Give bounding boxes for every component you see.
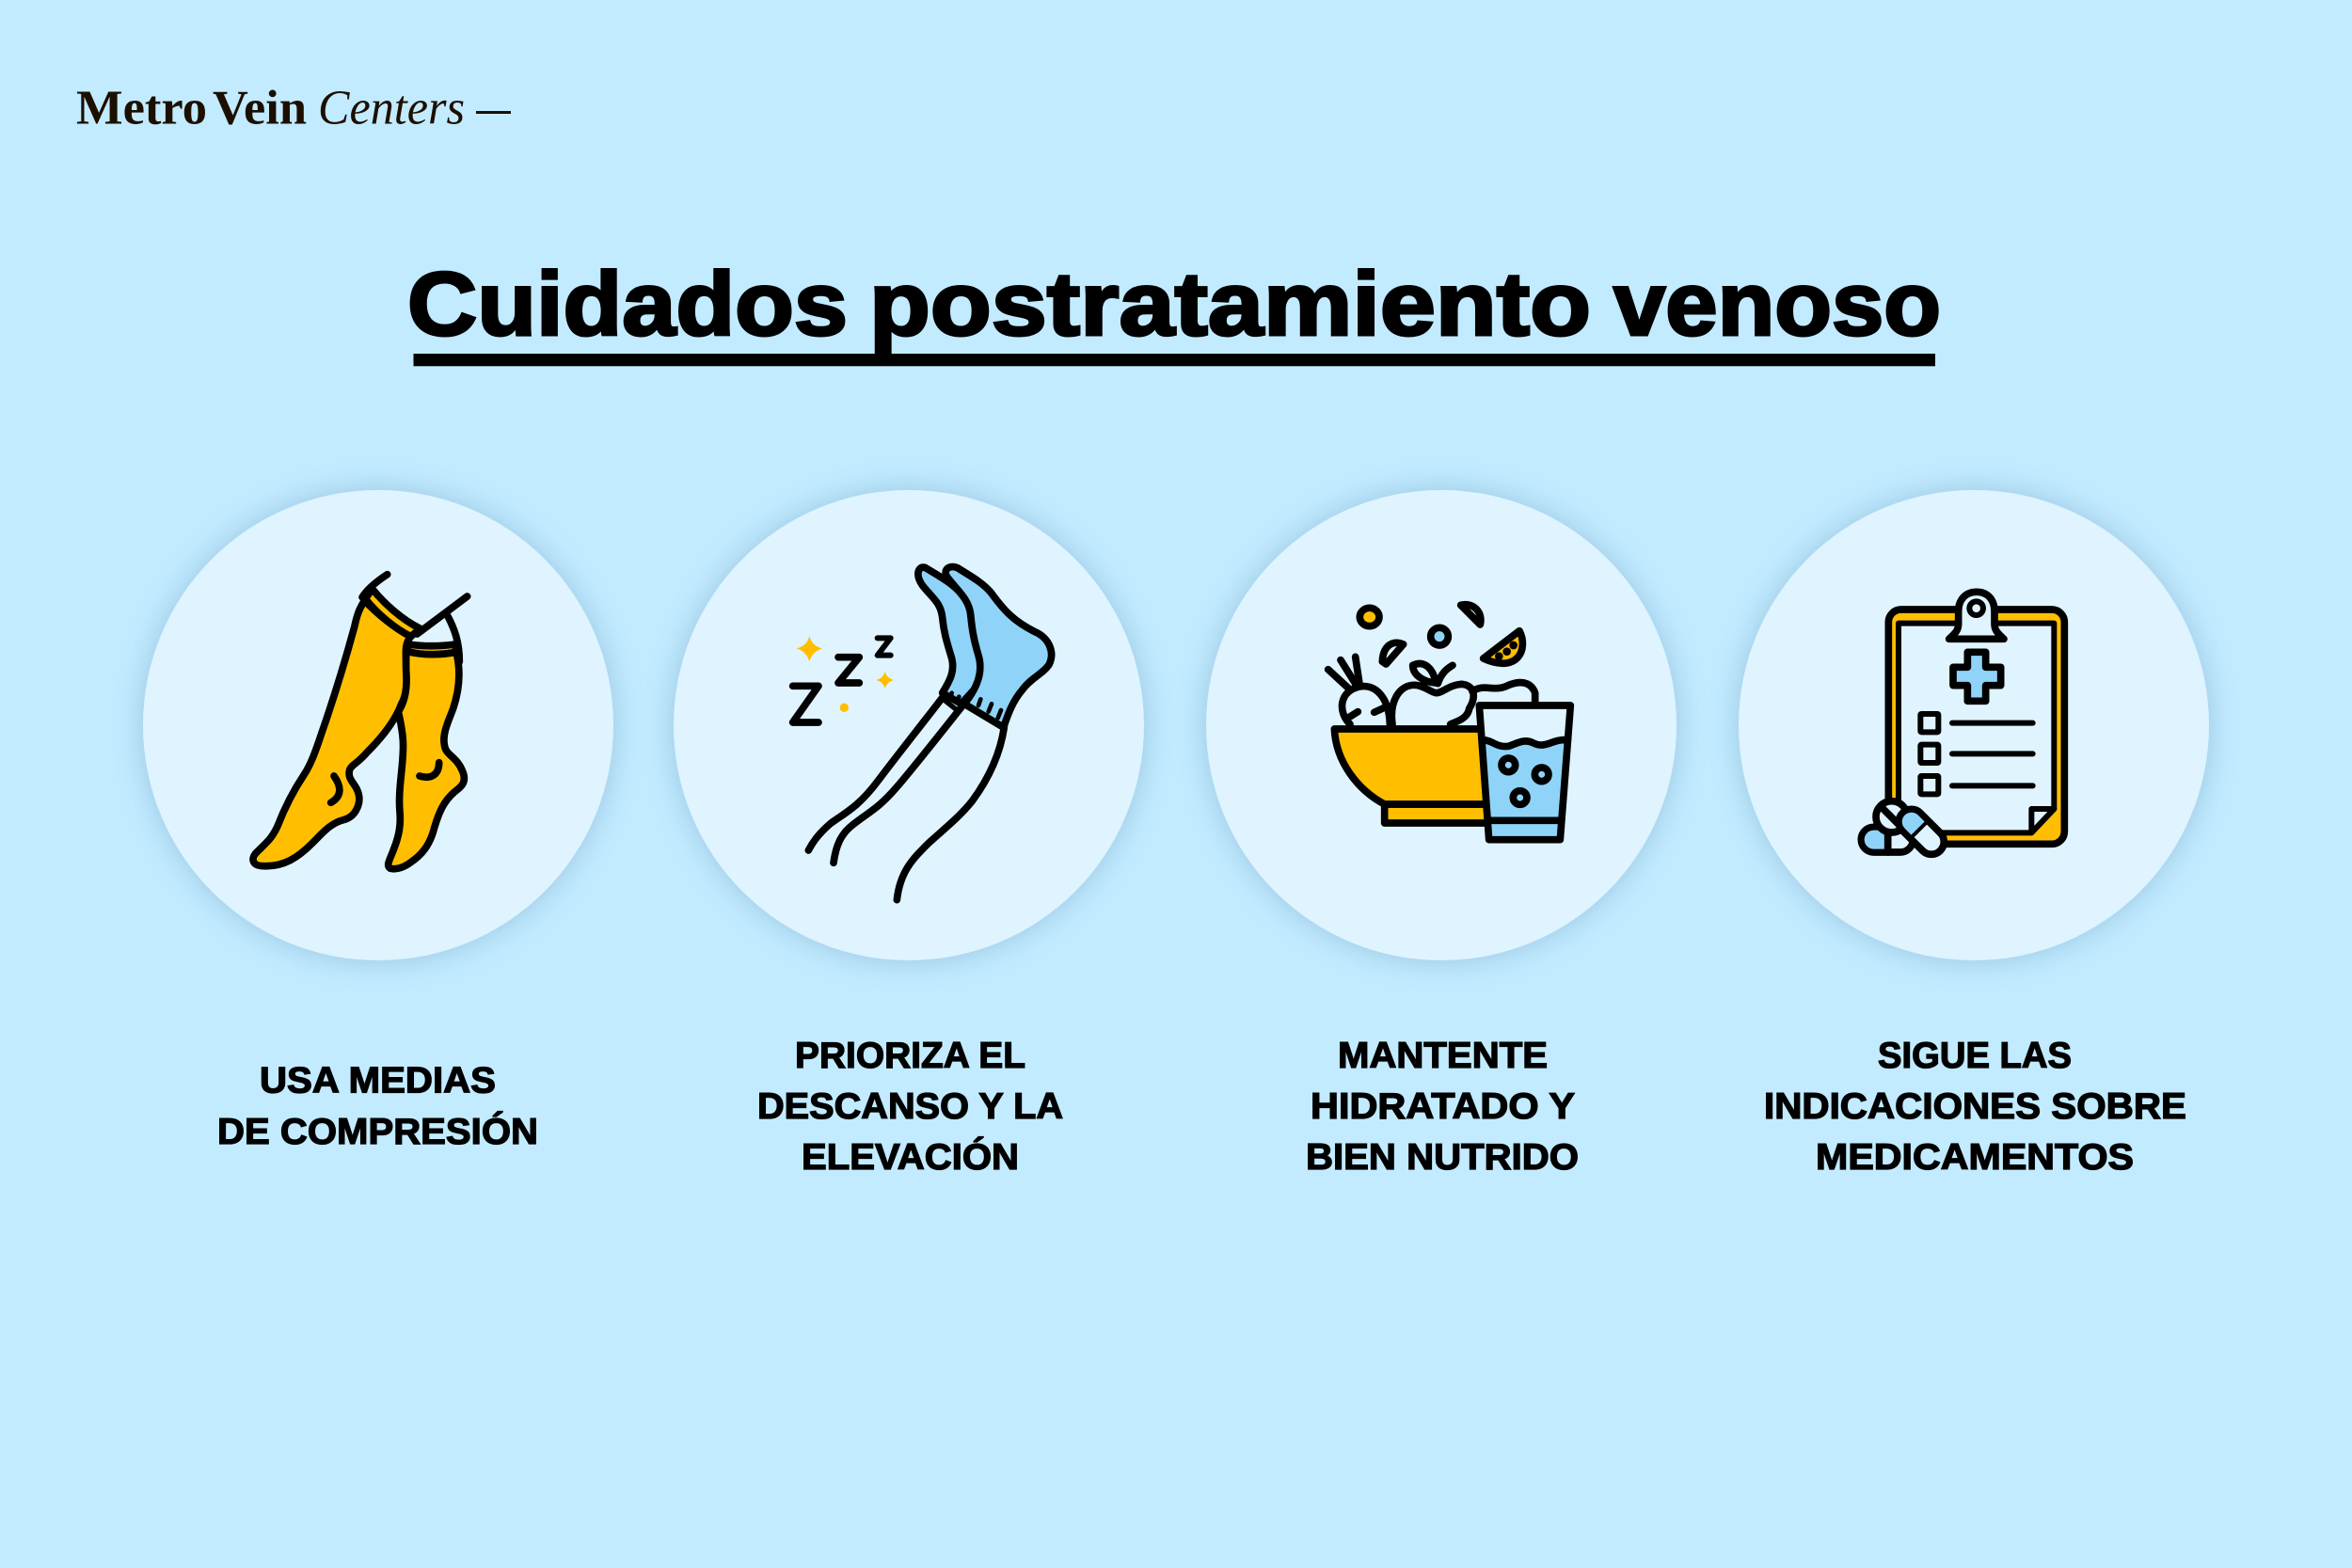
- panel: medias de compresión: [143, 490, 613, 1152]
- label 4: [1764, 1036, 2186, 1178]
- panel: hidratado y nutrido: [1206, 490, 1677, 1178]
- title: Cuidados: [407, 254, 848, 355]
- title: postratamiento: [869, 254, 1591, 355]
- label 3: MANTENTE: [1338, 1036, 1548, 1076]
- icon: clipboard and pills: [1861, 592, 2064, 860]
- label 4: INDICACIONES SOBRE: [1764, 1086, 2186, 1127]
- circle background 2: [674, 490, 1144, 960]
- label 1: DE COMPRESIÓN: [217, 1111, 538, 1152]
- logo: Metro Vein Centers: [76, 81, 511, 135]
- circle background 1: [143, 490, 613, 960]
- icon: food bowl and water glass: [1328, 605, 1570, 840]
- label 2: ELEVACIÓN: [802, 1136, 1019, 1178]
- label 4: MEDICAMENTOS: [1816, 1137, 2134, 1178]
- icon: raised legs and sleep: [793, 567, 1052, 900]
- panel: medicamentos: [1739, 490, 2209, 1178]
- label 3: [1306, 1036, 1579, 1178]
- label 2: DESCANSO Y LA: [757, 1086, 1063, 1127]
- label 3: HIDRATADO Y: [1311, 1086, 1575, 1127]
- label 4: SIGUE LAS: [1878, 1036, 2072, 1076]
- label 2: [757, 1036, 1063, 1178]
- logo: Metro Vein Centers: Vein: [213, 81, 307, 135]
- circle background 3: [1206, 490, 1677, 960]
- title: venoso: [1613, 254, 1941, 355]
- icon: compression socks: [253, 575, 468, 869]
- label 1: USA MEDIAS: [260, 1061, 496, 1101]
- panel: descanso y elevación: [674, 490, 1144, 1178]
- title: [407, 254, 1941, 366]
- label 1: [217, 1061, 538, 1152]
- logo: Metro Vein Centers: Centers: [318, 81, 465, 135]
- logo: Metro Vein Centers: Metro: [76, 81, 207, 135]
- circle background 4: [1739, 490, 2209, 960]
- label 3: BIEN NUTRIDO: [1306, 1137, 1579, 1178]
- label 2: PRIORIZA EL: [795, 1036, 1025, 1076]
